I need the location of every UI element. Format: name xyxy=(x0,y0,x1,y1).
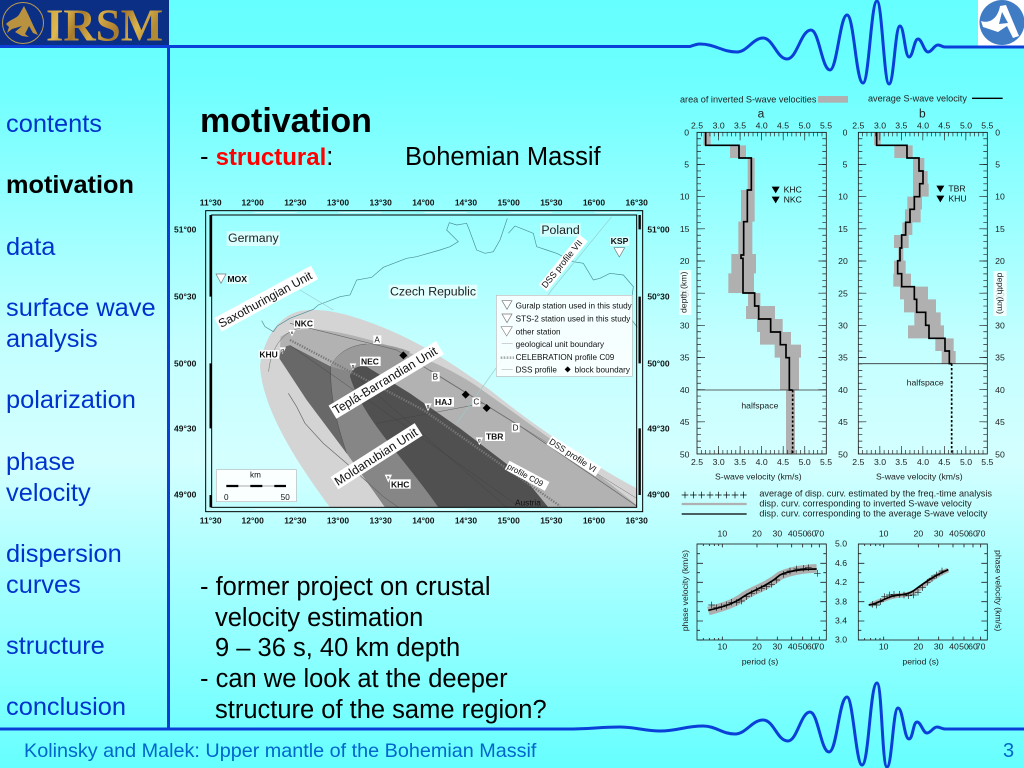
axis labels b: 0 xyxy=(995,128,1000,138)
axis labels a: 3.5 xyxy=(734,120,746,130)
block letters: C xyxy=(473,398,479,407)
axis labels b: 3.5 xyxy=(895,457,908,467)
axis labels a: 10 xyxy=(680,192,690,202)
average curve xyxy=(869,570,948,605)
stations b xyxy=(936,184,967,204)
axis labels: 10 xyxy=(718,642,727,652)
dispersion curves xyxy=(680,489,1004,667)
axis labels: 40 xyxy=(788,642,798,652)
label: Germany: Germany xyxy=(228,231,280,245)
map longitude labels: 15°30 xyxy=(540,515,563,525)
shared velocity scale: 4.6 xyxy=(835,558,847,568)
axis labels b: 45 xyxy=(838,417,848,427)
axis labels b: 15 xyxy=(838,224,848,234)
map longitude labels: 14°00 xyxy=(412,515,435,525)
station: KSP: KSP xyxy=(611,236,629,246)
station: NEC: NEC xyxy=(361,356,379,366)
axis labels xyxy=(879,528,1004,667)
axis labels a: 3.5 xyxy=(734,457,746,467)
map latitude labels: 50°30 xyxy=(174,292,197,302)
axis labels a: 5 xyxy=(684,160,689,170)
axis labels b: 0 xyxy=(843,128,848,138)
shared velocity scale: 5.0 xyxy=(835,539,847,549)
axis labels b: 2.5 xyxy=(852,457,865,467)
axis labels b: 5 xyxy=(995,160,1000,170)
panel letter a: a xyxy=(758,107,765,121)
station: HAJ xyxy=(424,397,454,411)
stations a xyxy=(772,185,802,205)
axis labels b: 35 xyxy=(838,353,848,363)
axis labels: 20 xyxy=(752,528,762,538)
axis labels b: 5.5 xyxy=(981,457,994,467)
uncertainty area b xyxy=(874,132,956,364)
axis labels: 60 xyxy=(807,528,817,538)
subtitle: Bohemian Massif xyxy=(405,143,601,171)
axes b xyxy=(858,132,987,454)
map latitude labels: 50°00 xyxy=(647,358,670,368)
map longitude labels: 12°00 xyxy=(242,198,264,208)
axis labels a: 2.5 xyxy=(691,457,703,467)
station: TBR: g xyxy=(478,437,481,442)
shared velocity scale: 3.0 xyxy=(835,635,847,645)
axis labels a: 3.0 xyxy=(713,120,725,130)
axis labels a: 5.5 xyxy=(820,457,832,467)
measured points xyxy=(869,568,945,608)
footer citation: Kolinsky and Malek: Upper mantle of the Bohemian Massif xyxy=(24,740,537,762)
inverted curve band xyxy=(870,570,948,605)
halfspace label a: halfspace xyxy=(741,401,779,411)
average curve xyxy=(708,569,817,610)
text block: project notes: - former project on crustal xyxy=(200,573,491,601)
axis labels a: 5.0 xyxy=(799,120,811,130)
map: Bohemian Massif xyxy=(174,198,670,525)
station: NKC: s xyxy=(291,330,294,335)
map latitude labels: 49°30 xyxy=(647,424,670,434)
axis labels: 20 xyxy=(914,642,923,652)
axis labels: 30 xyxy=(773,528,782,538)
map longitude labels xyxy=(200,198,648,525)
map legend: block boundary xyxy=(575,365,631,374)
panel: profile a xyxy=(679,107,832,481)
axis labels a: 4.5 xyxy=(777,457,789,467)
sidebar navigation: contents xyxy=(6,110,102,138)
map latitude labels: 50°30 xyxy=(647,292,670,302)
sidebar navigation xyxy=(6,110,156,721)
map longitude labels: 13°30 xyxy=(370,198,392,208)
stations a: KHC xyxy=(784,185,802,195)
axis labels: 10 xyxy=(879,528,889,538)
axis labels b: 2.5 xyxy=(852,120,865,130)
axis labels a: 45 xyxy=(680,417,690,427)
map legend xyxy=(496,295,633,376)
axis labels a xyxy=(680,120,832,481)
axis labels b: 15 xyxy=(995,224,1005,234)
halfspace boundary a xyxy=(697,389,826,391)
axis labels: 30 xyxy=(934,528,944,538)
stations b: KHU xyxy=(948,194,967,204)
axis labels: 50 xyxy=(959,528,969,538)
station: MOX xyxy=(216,274,249,284)
map longitude labels: 13°00 xyxy=(327,515,349,525)
map longitude labels: 12°30 xyxy=(284,198,307,208)
map longitude labels: 14°30 xyxy=(455,198,477,208)
map latitude labels: 51°00 xyxy=(174,224,197,234)
sidebar navigation: velocity xyxy=(6,479,91,507)
axis labels b: 45 xyxy=(995,417,1005,427)
axis labels: 40 xyxy=(788,528,798,538)
map longitude labels: 11°30 xyxy=(200,515,222,525)
station: NEC: g xyxy=(352,363,355,368)
axes a xyxy=(697,132,826,454)
axis labels a: 2.5 xyxy=(691,120,703,130)
axis labels b: 4.5 xyxy=(938,120,951,130)
velocity profiles xyxy=(679,94,1007,481)
axis labels b: 5.5 xyxy=(981,120,994,130)
shared velocity scale: 4.2 xyxy=(835,577,847,587)
label: Moldanubian Unit: Moldanubian Unit xyxy=(332,425,421,489)
axis labels a: S-wave velocity (km/s) xyxy=(715,471,802,481)
scale bar: 0 xyxy=(224,493,229,502)
map latitude labels: 49°00 xyxy=(174,490,197,500)
bottom waveform rule xyxy=(0,683,1024,767)
axis labels: phase velocity (km/s) xyxy=(994,550,1004,631)
axis labels: phase velocity (km/s) xyxy=(680,550,690,631)
block letters: A xyxy=(374,335,380,344)
panel letter b: b xyxy=(919,107,926,121)
stations xyxy=(259,319,505,489)
axis labels: period (s) xyxy=(742,657,778,667)
axis labels b: 5.0 xyxy=(960,120,972,130)
average velocity a xyxy=(706,132,793,390)
subtitle: - structural: xyxy=(200,143,333,171)
scale bar xyxy=(216,470,296,502)
axis labels: 10 xyxy=(718,528,727,538)
y-axis title b xyxy=(993,271,1007,316)
scale bar: 50 xyxy=(281,493,290,502)
panel: profile b xyxy=(838,107,1007,481)
map latitude labels: 49°30 xyxy=(174,424,197,434)
station: KHC xyxy=(385,475,411,489)
map legend: Guralp station used in this study xyxy=(516,302,633,311)
axis labels b: 3.0 xyxy=(874,120,886,130)
station: KHC: KHC xyxy=(391,479,409,489)
axis labels b: 10 xyxy=(995,192,1005,202)
y-axis title a: depth (km) xyxy=(679,272,689,313)
axis labels b: 3.0 xyxy=(874,457,886,467)
top waveform rule xyxy=(0,1,1024,84)
map longitude labels: 13°30 xyxy=(370,515,392,525)
sidebar navigation: polarization xyxy=(6,386,136,414)
velocity legend: average S-wave velocity xyxy=(868,94,967,104)
map legend: STS-2 station used in this study xyxy=(516,315,631,324)
map longitude labels: 11°30 xyxy=(200,198,222,208)
axis labels b: S-wave velocity (km/s) xyxy=(876,471,963,481)
axis labels b: 4.0 xyxy=(917,120,929,130)
label: Austria: Austria xyxy=(515,497,541,507)
axis labels: 10 xyxy=(879,642,889,652)
axis labels b: 5 xyxy=(843,160,848,170)
map longitude labels: 15°30 xyxy=(540,198,563,208)
block boundary markers xyxy=(399,351,491,412)
text block: project notes: - can we look at the deeper xyxy=(200,665,508,693)
label: DSS profile VII: DSS profile VII xyxy=(540,238,584,290)
label: Poland: Poland xyxy=(541,223,580,237)
stations b: TBR xyxy=(948,184,966,194)
axis labels a: 40 xyxy=(680,385,690,395)
stations a: NKC xyxy=(784,195,802,205)
station: KSP xyxy=(610,236,629,257)
sidebar divider line xyxy=(167,46,170,729)
map longitude labels: 16°30 xyxy=(626,515,648,525)
map longitude labels: 16°30 xyxy=(626,198,648,208)
axis labels b: 50 xyxy=(995,449,1005,459)
label: profile C09: profile C09 xyxy=(506,462,545,489)
sidebar navigation: curves xyxy=(6,571,81,599)
sidebar navigation: motivation xyxy=(6,171,134,199)
map longitude labels: 12°00 xyxy=(242,515,264,525)
axis labels: 60 xyxy=(968,528,978,538)
axis labels a: 35 xyxy=(680,353,690,363)
axis labels a: 25 xyxy=(680,288,690,298)
axis labels: 50 xyxy=(798,528,808,538)
axis labels a: 5.0 xyxy=(799,457,811,467)
axis labels: 70 xyxy=(815,528,824,538)
map longitude labels: 14°00 xyxy=(412,198,435,208)
map legend: geological unit boundary xyxy=(516,340,605,349)
label: Czech Republic: Czech Republic xyxy=(390,285,476,299)
map latitude labels: 49°00 xyxy=(647,490,670,500)
label: Teplá-Barrandian Unit: Teplá-Barrandian Unit xyxy=(330,344,440,417)
sidebar navigation: dispersion xyxy=(6,540,122,568)
map longitude labels: 14°30 xyxy=(455,515,477,525)
station: NEC xyxy=(350,356,381,371)
axis labels b: 20 xyxy=(995,256,1005,266)
axis labels b: 20 xyxy=(838,256,848,266)
axis labels b: 3.5 xyxy=(895,120,908,130)
axis labels b: 50 xyxy=(838,449,848,459)
sidebar navigation: phase xyxy=(6,448,75,476)
station: TBR: TBR xyxy=(486,431,503,441)
logo: institute emblem xyxy=(978,0,1024,46)
velocity legend: area of inverted S-wave velocities xyxy=(680,95,817,105)
sidebar navigation: structure xyxy=(6,632,105,660)
label: Saxothuringian Unit: Saxothuringian Unit xyxy=(216,268,315,331)
text block: project notes: 9 – 36 s, 40 km depth xyxy=(215,634,460,662)
station: KHU: KHU xyxy=(259,349,278,359)
map country borders xyxy=(262,218,637,507)
sidebar navigation: surface wave xyxy=(6,294,156,322)
axis labels: 30 xyxy=(934,642,944,652)
map legend: DSS profile xyxy=(516,365,557,374)
scale bar: km xyxy=(250,471,261,480)
station: KHU: g xyxy=(281,347,284,352)
axis labels b: 30 xyxy=(838,321,848,331)
dispersion legend: disp. curv. corresponding to the average S-wave velocity xyxy=(759,509,988,519)
axis labels: 70 xyxy=(976,642,986,652)
station: KHU xyxy=(259,347,286,359)
axis labels: 40 xyxy=(949,528,959,538)
panel: dispersion plot a xyxy=(680,528,826,667)
axis labels: 50 xyxy=(798,642,808,652)
shared velocity scale: 3.8 xyxy=(835,596,847,606)
map longitude labels: 15°00 xyxy=(498,198,520,208)
station: HAJ: g xyxy=(427,403,430,408)
map latitude labels: 50°00 xyxy=(174,358,197,368)
map longitude labels: 15°00 xyxy=(498,515,520,525)
sidebar navigation: analysis xyxy=(6,325,98,353)
measured points xyxy=(708,564,821,611)
sidebar navigation: conclusion xyxy=(6,693,126,721)
axis labels b: 4.0 xyxy=(917,457,929,467)
axis labels b xyxy=(838,120,1005,481)
halfspace boundary b xyxy=(858,362,987,365)
axis labels a: 30 xyxy=(680,321,690,331)
subtitle xyxy=(200,143,601,171)
block letters xyxy=(373,335,520,432)
axes xyxy=(858,544,987,640)
axis labels: period (s) xyxy=(902,657,939,667)
dispersion legend: disp. curv. corresponding to inverted S-wave velocity xyxy=(759,499,972,509)
map longitude labels: 16°00 xyxy=(583,198,605,208)
text block: project notes xyxy=(200,573,547,724)
axis labels b: 40 xyxy=(995,385,1005,395)
map legend: other station xyxy=(516,327,561,336)
station: TBR xyxy=(476,431,505,445)
axis labels a: 0 xyxy=(684,128,689,138)
text block: project notes: structure of the same region? xyxy=(215,696,547,724)
halfspace label b: halfspace xyxy=(907,378,944,388)
axis labels b: 25 xyxy=(838,288,848,298)
map legend: CELEBRATION profile C09 xyxy=(516,353,615,362)
axis labels xyxy=(680,528,824,667)
axis labels: 70 xyxy=(976,528,986,538)
inverted curve band xyxy=(708,568,817,611)
block letters: D xyxy=(513,423,519,432)
axis labels a: 5.5 xyxy=(820,120,832,130)
station: NKC: NKC xyxy=(295,319,313,329)
block letters: B xyxy=(433,372,439,381)
axis labels a: 4.5 xyxy=(777,120,789,130)
map latitude labels: 51°00 xyxy=(647,224,670,234)
map longitude labels: 16°00 xyxy=(583,515,605,525)
uncertainty area a xyxy=(703,132,801,454)
logo: IRSM: IRSM xyxy=(46,0,163,50)
page number: 3 xyxy=(1003,740,1014,762)
station: KHC: s xyxy=(387,475,390,480)
axis labels: 40 xyxy=(949,642,959,652)
axis labels b: 25 xyxy=(995,288,1005,298)
axis labels a: 20 xyxy=(680,256,690,266)
dispersion legend xyxy=(682,489,992,519)
station: NKC xyxy=(289,319,314,337)
shared velocity scale: 3.4 xyxy=(835,616,847,626)
axis labels: 60 xyxy=(807,642,817,652)
axis labels: 20 xyxy=(752,642,762,652)
text block: project notes: velocity estimation xyxy=(215,604,423,632)
label: DSS profile VI: DSS profile VI xyxy=(547,436,598,474)
axis labels b: 35 xyxy=(995,353,1005,363)
map longitude labels: 13°00 xyxy=(327,198,349,208)
axis labels: 30 xyxy=(773,642,782,652)
y-axis title b: depth (km) xyxy=(995,273,1005,314)
axis labels b: 5.0 xyxy=(960,457,972,467)
axis labels a: 50 xyxy=(680,449,690,459)
axis labels: 50 xyxy=(959,642,969,652)
axis labels a: 3.0 xyxy=(713,457,725,467)
title: motivation xyxy=(200,102,372,140)
axis labels b: 10 xyxy=(838,192,848,202)
shared velocity scale xyxy=(835,539,847,645)
station: HAJ: HAJ xyxy=(435,397,452,407)
average velocity b xyxy=(877,132,952,364)
axis labels b: 4.5 xyxy=(938,457,951,467)
station: MOX: MOX xyxy=(227,274,247,284)
map latitude labels xyxy=(174,224,670,500)
axis labels a: 4.0 xyxy=(756,120,768,130)
axis labels b: 30 xyxy=(995,321,1005,331)
axis labels: 70 xyxy=(815,642,824,652)
axis labels a: 15 xyxy=(680,224,690,234)
dispersion legend: average of disp. curv. estimated by the freq.-time analysis xyxy=(759,489,992,499)
profile lines xyxy=(290,217,637,506)
velocity legend xyxy=(680,94,1003,105)
axes xyxy=(697,544,826,640)
axis labels a: 4.0 xyxy=(756,457,768,467)
axis labels b: 40 xyxy=(838,385,848,395)
sidebar navigation: data xyxy=(6,233,56,261)
map frame xyxy=(206,211,643,512)
map unit boundaries xyxy=(269,328,520,507)
axis labels: 20 xyxy=(914,528,923,538)
axis labels: 60 xyxy=(968,642,978,652)
map longitude labels: 12°30 xyxy=(284,515,307,525)
map geological units xyxy=(260,310,637,507)
panel: dispersion plot b xyxy=(858,528,1004,667)
